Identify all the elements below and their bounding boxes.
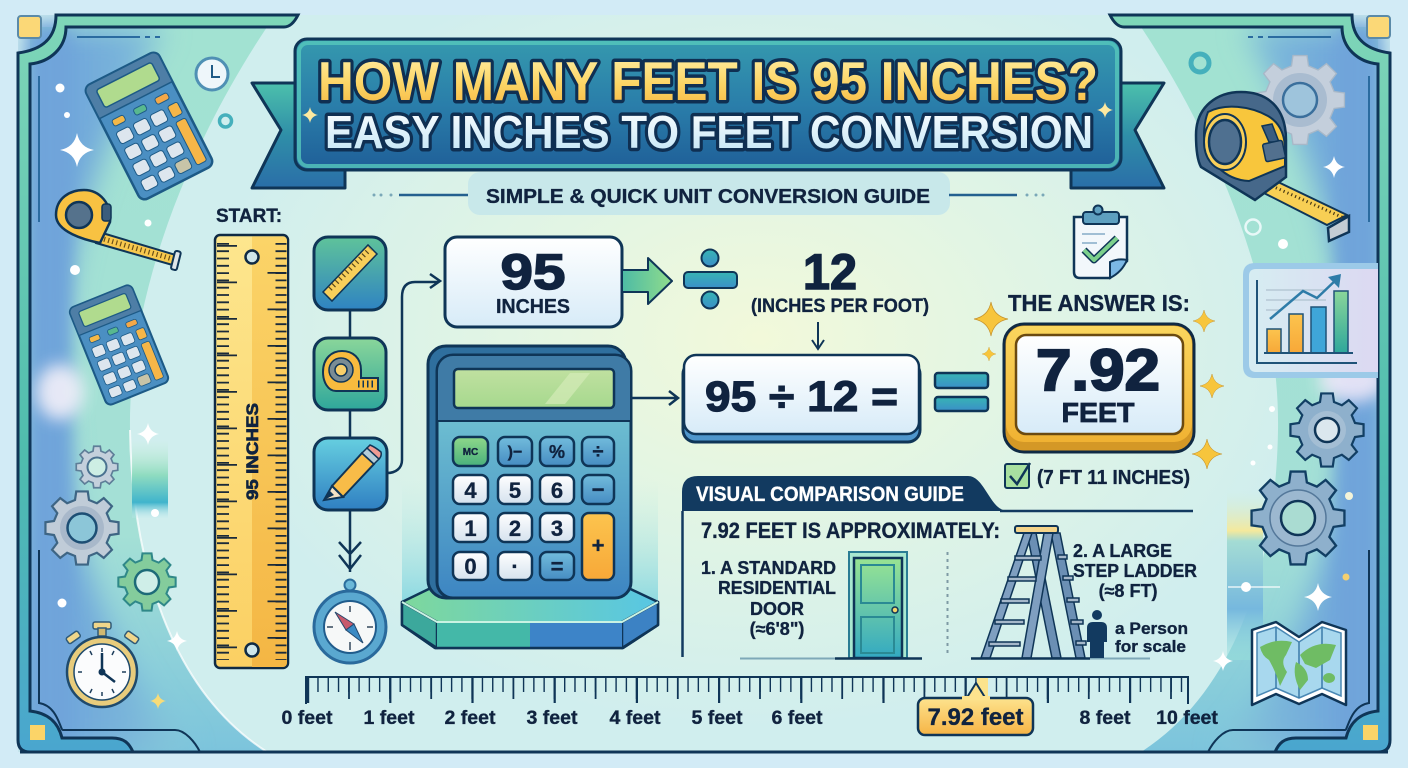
decorative ring: [220, 115, 232, 127]
scale labels: 8 feet: [1080, 707, 1131, 729]
icon: step ladder: [981, 526, 1086, 658]
marker pill: 7.92 feet: [918, 683, 1033, 735]
calculator body: [428, 346, 626, 598]
left side panel gradient: [30, 27, 267, 752]
icon: stopwatch: [66, 622, 139, 707]
icon: green gear: [118, 553, 176, 611]
title line two: EASY INCHES TO FEET CONVERSION: [325, 106, 1093, 158]
big calculator on pedestal: 6: [551, 478, 563, 503]
big calculator on pedestal: ·: [511, 554, 519, 579]
comparison item two: [1073, 541, 1197, 601]
big calculator on pedestal: 0: [464, 554, 477, 579]
ground line ladder: [971, 657, 1090, 660]
icon: large tape measure: [1196, 92, 1349, 241]
calculator screen: [454, 369, 614, 408]
right side panel gradient: [1141, 27, 1387, 752]
icon: equals sign: [935, 373, 988, 411]
subtitle pill: SIMPLE & QUICK UNIT CONVERSION GUIDE: [486, 186, 930, 208]
arrow: pencil to 95 inches: [387, 274, 440, 473]
icon: large tilted calculator: [83, 50, 215, 202]
icon: right small gear: [1290, 393, 1364, 467]
icon: wall clock: [196, 58, 228, 90]
scale labels: 6 feet: [772, 707, 823, 729]
scale labels: [282, 707, 1218, 729]
comparison item one: RESIDENTIAL: [718, 578, 836, 598]
big calculator on pedestal: 4: [464, 478, 477, 503]
panel: visual comparison guide: VISUAL COMPARISON GUIDE: [696, 483, 964, 506]
gold sparkle lower left: [150, 693, 166, 709]
pedestal: [402, 585, 658, 648]
gold sparkles around answer: [974, 302, 1224, 469]
big calculator on pedestal: 1: [464, 516, 477, 541]
scale labels: 10 feet: [1156, 707, 1218, 729]
person caption: for scale: [1115, 637, 1186, 656]
icon: clipboard check: [1074, 206, 1127, 278]
banner plate: [295, 39, 1121, 170]
bottom scale ruler: [282, 677, 1218, 735]
marker pill: 7.92 feet: 7.92 feet: [928, 704, 1024, 731]
big calculator on pedestal: 3: [551, 516, 563, 541]
ribbon left: [252, 83, 345, 188]
answer box: 7.92: [1036, 338, 1160, 403]
subtitle pill: [372, 172, 1044, 215]
person caption: [1115, 619, 1188, 656]
comparison intro: 7.92 FEET IS APPROXIMATELY:: [701, 518, 1000, 543]
ribbon right: [1071, 83, 1164, 188]
comparison item two: STEP LADDER: [1073, 561, 1197, 581]
big calculator on pedestal: +: [592, 533, 604, 558]
scale labels: 1 feet: [364, 707, 415, 729]
divider: [946, 552, 948, 655]
divisor 12: 12: [803, 244, 857, 300]
person caption: a Person: [1115, 619, 1188, 638]
arrow: 95 to divide: [622, 258, 672, 304]
step connectors: [339, 308, 361, 572]
scale labels: 2 feet: [445, 707, 496, 729]
title line one: HOW MANY FEET IS 95 INCHES?: [318, 50, 1098, 112]
answer box: [1004, 324, 1194, 452]
decorative frame, right: [1110, 15, 1390, 752]
dots and sparkles, right lower: [1213, 406, 1353, 671]
scale labels: 0 feet: [282, 707, 333, 729]
sparkles, upper left: [56, 84, 152, 275]
icon: compass: [314, 580, 386, 663]
comparison item two: 2. A LARGE: [1073, 541, 1172, 561]
panel: visual comparison guide: [682, 476, 1197, 658]
sparkles, lower left: [58, 423, 187, 651]
big calculator on pedestal: ÷: [593, 441, 604, 463]
start label: START:: [216, 206, 282, 227]
icon: large grey gear: [45, 491, 119, 565]
panel tab heading: [682, 476, 1008, 511]
decorative frame, left: [18, 15, 298, 752]
lower-left gears: [45, 446, 176, 611]
divisor caption: (INCHES PER FOOT): [751, 296, 929, 317]
icon: folded map: [1252, 622, 1346, 705]
comparison item one: 1. A STANDARD: [701, 558, 836, 578]
icon: small tape measure: [56, 190, 181, 270]
decorative ring right: [1246, 220, 1260, 234]
box: 95 inches: INCHES: [496, 296, 570, 318]
arrow: down to equation: [812, 322, 824, 349]
banner sparkles: [302, 102, 1113, 123]
comparison item one: DOOR: [750, 599, 804, 619]
icon: person: [1087, 610, 1107, 658]
scale labels: 3 feet: [527, 707, 578, 729]
ground line door: [835, 657, 922, 660]
big calculator on pedestal: %: [549, 442, 565, 462]
box: equation: 95 ÷ 12 =: [705, 373, 898, 421]
panel: growth chart: [1243, 263, 1378, 378]
scale labels: 5 feet: [692, 707, 743, 729]
comparison item two: (≈8 FT): [1099, 581, 1157, 601]
big calculator on pedestal: )−: [508, 444, 522, 461]
icon: small tilted calculator: [68, 284, 170, 406]
box: 95 inches: 95: [500, 244, 566, 300]
calculator keys: [453, 437, 614, 580]
icon tile: pencil: [314, 438, 387, 510]
vertical ruler: [215, 235, 288, 668]
icon: door: [849, 552, 907, 658]
answer label: THE ANSWER IS:: [1008, 290, 1190, 316]
pedestal glow: [402, 480, 658, 605]
big calculator on pedestal: 2: [509, 516, 521, 541]
sparkles, right upper: [1278, 156, 1345, 249]
answer box: FEET: [1062, 397, 1134, 428]
icon: small grey gear: [76, 446, 118, 488]
comparison item one: (≈6'8"): [750, 619, 804, 639]
big calculator on pedestal: MC: [463, 447, 478, 458]
frame bottom line: [20, 750, 1388, 754]
big calculator on pedestal: =: [551, 554, 563, 579]
icon tile: tape measure: [314, 338, 386, 410]
arrow: calculator to equation: [631, 391, 678, 405]
scale labels: 4 feet: [610, 707, 661, 729]
icon: right large gear: [1252, 472, 1344, 564]
big calculator on pedestal: 5: [509, 478, 521, 503]
answer in feet and inches: [1005, 463, 1190, 489]
box: 95 inches: [445, 237, 622, 327]
title banner: [252, 39, 1164, 188]
big calculator on pedestal: [402, 346, 658, 648]
box: equation: [683, 355, 920, 442]
ruler label: 95 INCHES: [243, 403, 262, 500]
icon: right gear behind tape: [1256, 56, 1344, 144]
icon: divide sign: [684, 250, 737, 308]
comparison item one: [701, 558, 836, 639]
marker highlight: [977, 678, 988, 698]
big calculator on pedestal: −: [592, 477, 604, 502]
answer in feet and inches: (7 FT 11 INCHES): [1037, 467, 1190, 489]
icon tile: ruler: [314, 237, 386, 310]
decorative ring top right: [1191, 54, 1209, 72]
